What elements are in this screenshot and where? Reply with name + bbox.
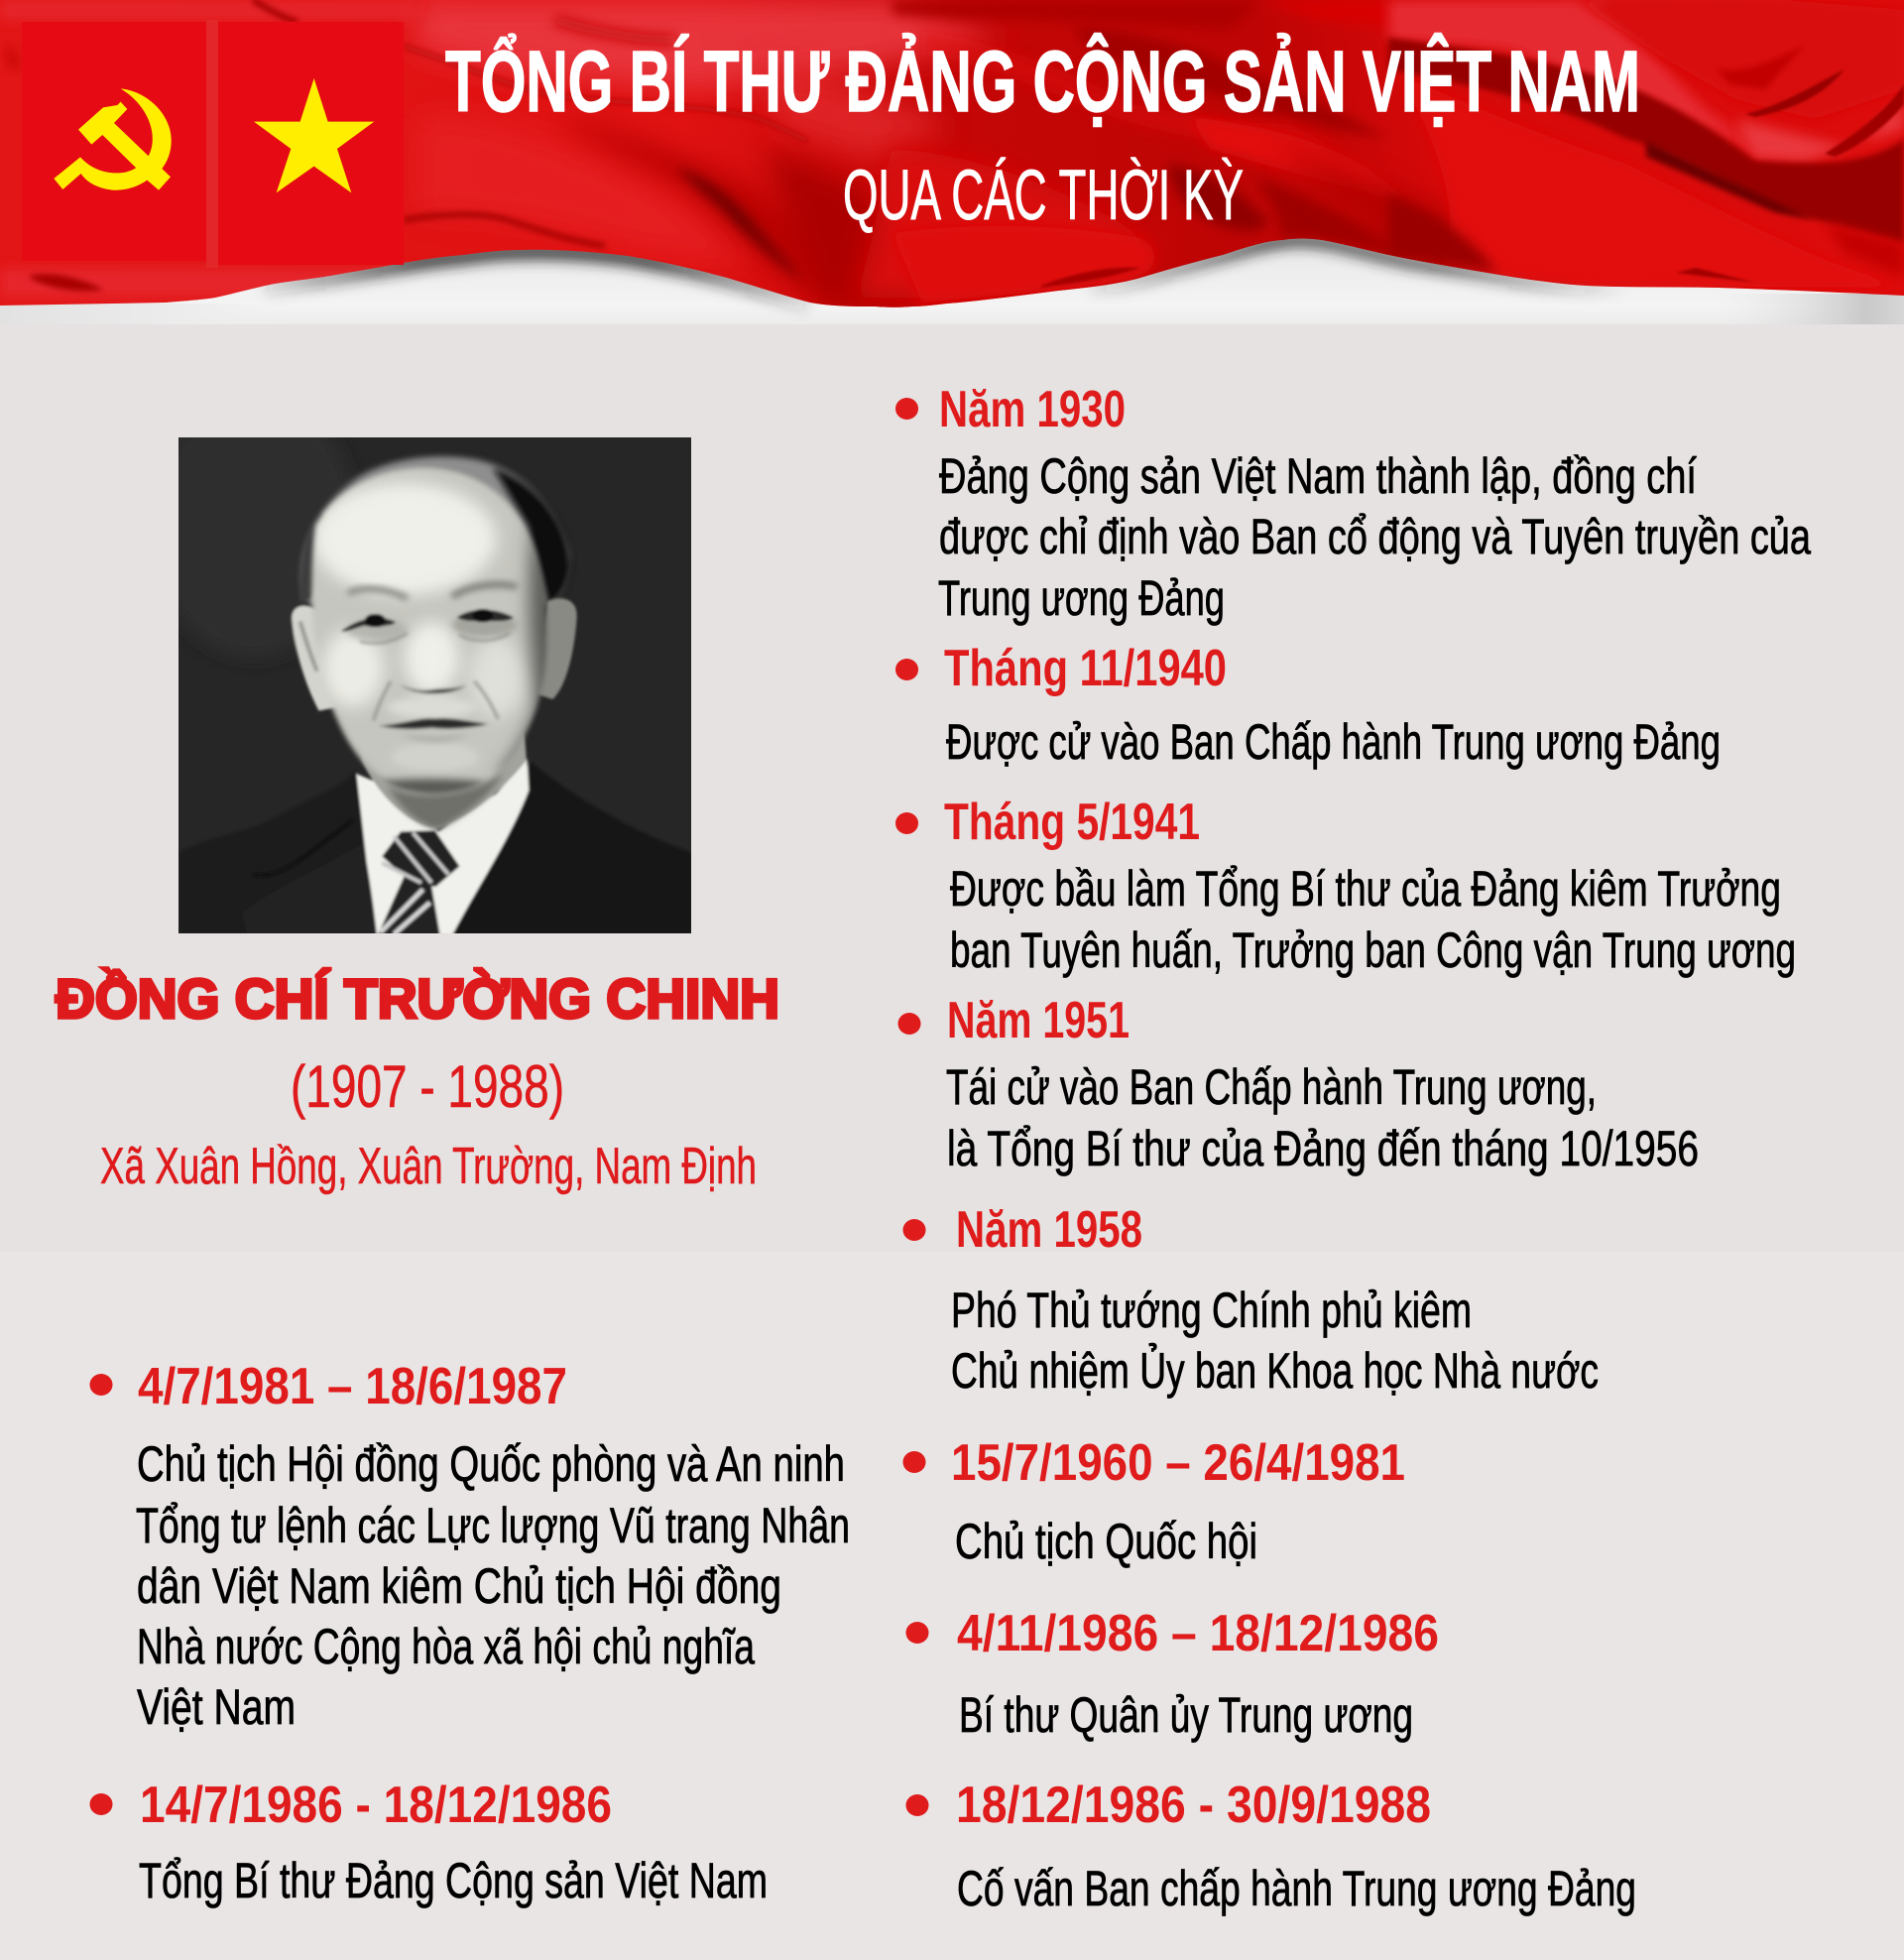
timeline entry: 15/7/1960 – 26/4/1981: Chủ tịch Quốc hội: [955, 1514, 1257, 1569]
timeline entry: 4/7/1981 – 18/6/1987: Việt Nam: [137, 1679, 296, 1735]
timeline entry: Năm 1930: Năm 1930: [939, 381, 1126, 438]
timeline entry: Tháng 5/1941: Tháng 5/1941: [944, 794, 1200, 851]
timeline entry: Năm 1951: là Tổng Bí thư của Đảng đến tháng 10/1956: [947, 1121, 1699, 1176]
timeline entry: Năm 1958: Năm 1958: [956, 1201, 1142, 1259]
timeline entry: Năm 1958: Phó Thủ tướng Chính phủ kiêm: [951, 1283, 1472, 1338]
timeline entry: 4/7/1981 – 18/6/1987: Chủ tịch Hội đồng Quốc phòng và An ninh: [137, 1436, 845, 1492]
timeline entry: 18/12/1986 - 30/9/1988: [906, 1776, 1636, 1916]
timeline entry: 4/7/1981 – 18/6/1987: [89, 1358, 850, 1735]
subtitle: QUA CÁC THỜI KỲ: [843, 157, 1244, 235]
timeline entry: 18/12/1986 - 30/9/1988: 18/12/1986 - 30/9/1988: [956, 1776, 1431, 1834]
timeline entry: Năm 1930: [895, 381, 1811, 626]
name heading: ĐỒNG CHÍ TRƯỜNG CHINH: [56, 967, 779, 1030]
timeline entry: 15/7/1960 – 26/4/1981: 15/7/1960 – 26/4/1981: [951, 1434, 1405, 1492]
timeline entry: Năm 1958: [902, 1201, 1599, 1399]
timeline entry: 4/7/1981 – 18/6/1987: Tổng tư lệnh các Lực lượng Vũ trang Nhân: [136, 1498, 850, 1553]
icon: national flag with star: [218, 22, 404, 265]
life dates: (1907 - 1988): [291, 1053, 564, 1120]
birthplace: Xã Xuân Hồng, Xuân Trường, Nam Định: [100, 1138, 757, 1195]
timeline entry: Năm 1958: Chủ nhiệm Ủy ban Khoa học Nhà nước: [951, 1342, 1599, 1399]
timeline entry: 18/12/1986 - 30/9/1988: Cố vấn Ban chấp hành Trung ương Đảng: [957, 1861, 1636, 1916]
timeline entry: 4/11/1986 – 18/12/1986: 4/11/1986 – 18/12/1986: [957, 1605, 1439, 1662]
timeline entry: 14/7/1986 - 18/12/1986: 14/7/1986 - 18/12/1986: [140, 1776, 612, 1834]
icon: party flag with hammer and sickle: [22, 22, 206, 261]
timeline entry: 4/11/1986 – 18/12/1986: Bí thư Quân ủy Trung ương: [959, 1687, 1413, 1743]
timeline entry: Tháng 11/1940: Tháng 11/1940: [944, 640, 1227, 697]
page background: upper section: [0, 0, 1904, 1252]
timeline entry: 4/7/1981 – 18/6/1987: dân Việt Nam kiêm Chủ tịch Hội đồng: [137, 1558, 781, 1614]
timeline entry: 14/7/1986 - 18/12/1986: [89, 1776, 768, 1908]
timeline entry: Tháng 5/1941: [895, 794, 1796, 978]
timeline entry: Năm 1951: Năm 1951: [947, 992, 1130, 1049]
timeline entry: Năm 1951: Tái cử vào Ban Chấp hành Trung ương,: [946, 1059, 1597, 1115]
timeline entry: 14/7/1986 - 18/12/1986: Tổng Bí thư Đảng Cộng sản Việt Nam: [139, 1853, 768, 1908]
timeline entry: 15/7/1960 – 26/4/1981: [902, 1434, 1405, 1569]
timeline entry: 4/7/1981 – 18/6/1987: 4/7/1981 – 18/6/1987: [138, 1358, 567, 1415]
timeline entry: Năm 1930: Trung ương Đảng: [938, 570, 1225, 626]
timeline entry: Tháng 11/1940: [895, 640, 1721, 770]
page background: lower section: [0, 1252, 1904, 1960]
banner: red flag header: [0, 0, 1904, 324]
portrait photo of Trường Chinh: [178, 437, 691, 933]
timeline entry: Năm 1951: [898, 992, 1699, 1176]
timeline entry: 4/7/1981 – 18/6/1987: Nhà nước Cộng hòa xã hội chủ nghĩa: [137, 1619, 755, 1674]
timeline entry: 4/11/1986 – 18/12/1986: [906, 1605, 1439, 1743]
